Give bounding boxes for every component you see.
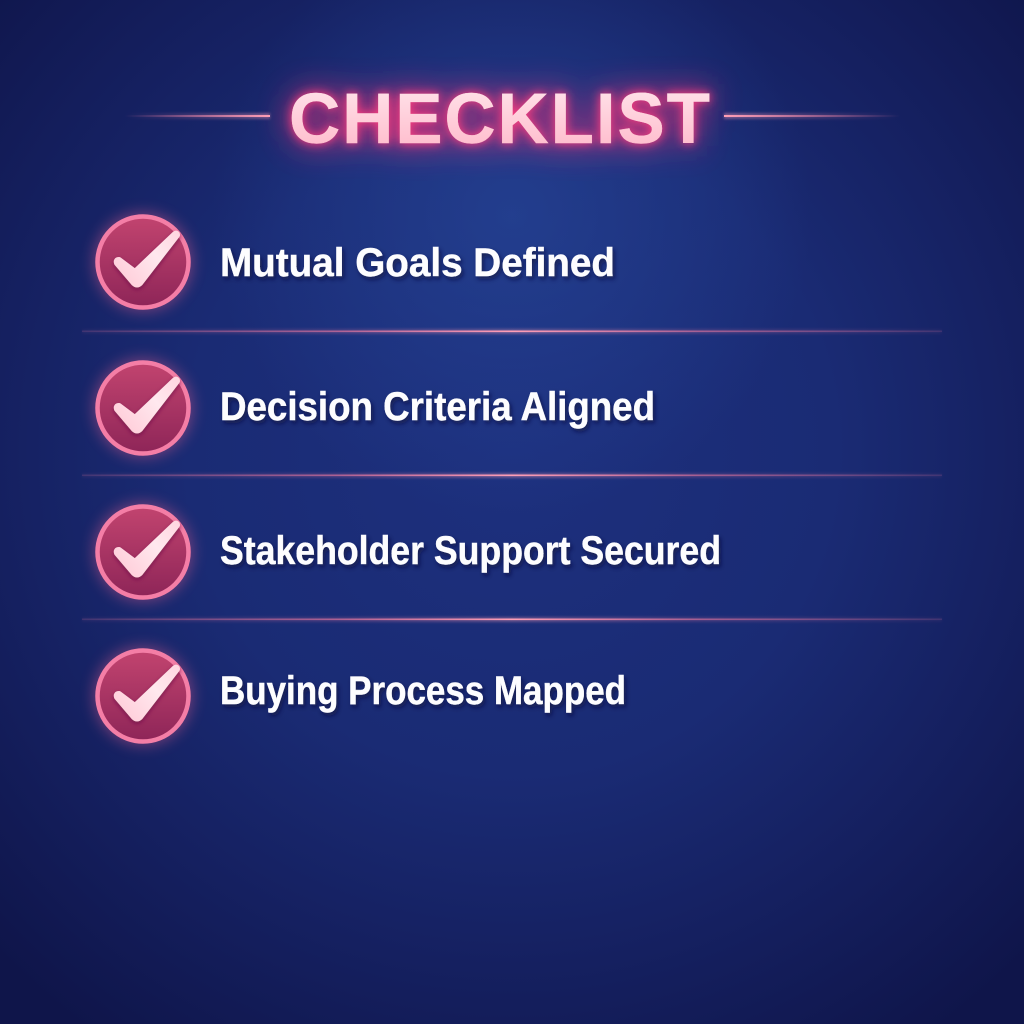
label: decision criteria aligned: Decision Criteria Aligned: [220, 385, 655, 429]
divider 1: [82, 329, 942, 334]
divider 3: [82, 617, 942, 622]
title: CHECKLIST: [289, 80, 710, 159]
checklist item 3: [93, 502, 721, 602]
icon: check badge 2: [93, 358, 193, 458]
checklist item 2: [93, 358, 655, 458]
checklist item 1: [93, 212, 615, 312]
label: mutual goals defined: Mutual Goals Defined: [220, 241, 615, 285]
icon: check badge 1: [93, 212, 193, 312]
label: stakeholder support secured: Stakeholder Support Secured: [220, 529, 721, 573]
title: CHECKLIST: [289, 80, 710, 159]
checklist item 4: [93, 646, 626, 746]
title: CHECKLIST: [289, 80, 710, 159]
label: buying process mapped: Buying Process Mapped: [220, 669, 626, 713]
divider 2: [82, 473, 942, 478]
title rule right: [724, 113, 900, 119]
icon: check badge 3: [93, 502, 193, 602]
icon: check badge 4: [93, 646, 193, 746]
title rule left: [125, 113, 270, 119]
